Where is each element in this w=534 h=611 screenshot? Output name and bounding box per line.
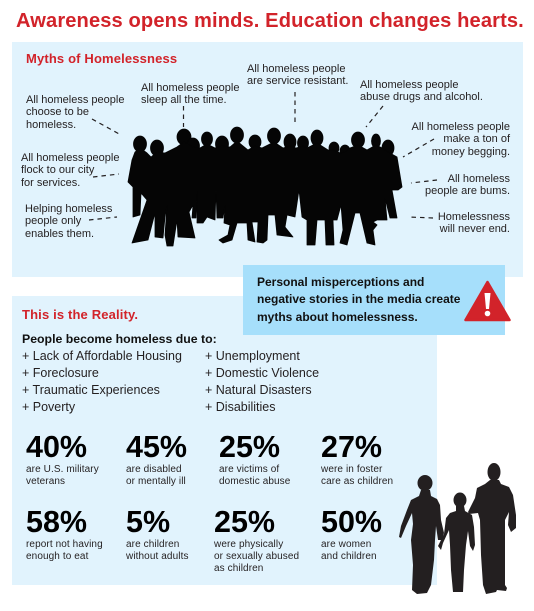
stat: 25% victims: are victims of bbox=[219, 464, 279, 474]
myth: enables: enables them. bbox=[25, 228, 94, 240]
myth: service resistant: are service resistant. bbox=[247, 75, 348, 87]
stat: 5%: without adults bbox=[126, 551, 189, 562]
stat: 45%: or mentally ill bbox=[126, 476, 186, 487]
stat: 45%: are disabled bbox=[126, 464, 182, 474]
stat: 40%: veterans bbox=[26, 476, 65, 487]
myth: never end: will never end. bbox=[440, 223, 510, 235]
myth: drugs: abuse drugs and alcohol. bbox=[360, 91, 483, 103]
causes list left bbox=[22, 349, 182, 414]
myth: flock bbox=[21, 152, 119, 189]
stat: 40% bbox=[26, 430, 99, 487]
causes list left: + Poverty bbox=[22, 400, 75, 414]
stat: 25% victims: 25% bbox=[219, 430, 280, 464]
myth: flock: flock to our city bbox=[21, 164, 94, 176]
myth: bums: people are bums. bbox=[425, 185, 510, 197]
stat: 27%: care as children bbox=[321, 476, 393, 487]
panel: reality bbox=[12, 296, 437, 585]
callout text: Personal misperceptions and bbox=[257, 274, 424, 288]
causes list right: + Disabilities bbox=[205, 400, 276, 414]
myth: begging: All homeless people bbox=[412, 121, 510, 133]
child bbox=[438, 492, 475, 592]
myth: never end: Homelessness bbox=[438, 211, 510, 223]
heading: reality: This is the Reality. bbox=[22, 307, 138, 322]
stat: 45%: 45% bbox=[126, 430, 187, 464]
stat: 5%: are children bbox=[126, 538, 179, 550]
causes list right bbox=[205, 349, 319, 414]
myth: choose: choose to be bbox=[26, 106, 89, 118]
stat: 27%: were in foster bbox=[321, 464, 382, 474]
myth: service resistant bbox=[247, 62, 348, 87]
stat: 50%: are women bbox=[321, 538, 371, 550]
man bbox=[468, 463, 516, 594]
stat: 25% abused bbox=[214, 505, 299, 574]
stat: 40%: 40% bbox=[26, 430, 87, 464]
title: Awareness opens minds. Education changes hearts. bbox=[16, 10, 524, 32]
myth: choose: homeless. bbox=[26, 119, 76, 131]
stat: 40%: are U.S. military bbox=[26, 464, 99, 474]
myth: begging bbox=[412, 121, 510, 158]
myth: begging: make a ton of bbox=[443, 133, 510, 145]
causes list left: + Traumatic Experiences bbox=[22, 383, 160, 397]
myth: bums bbox=[425, 172, 510, 197]
stat: 58%: enough to eat bbox=[26, 551, 88, 562]
stat: 50% bbox=[321, 505, 382, 562]
causes list right: + Unemployment bbox=[205, 349, 300, 363]
causes list right: + Domestic Violence bbox=[205, 366, 319, 380]
myth: sleep bbox=[141, 82, 239, 106]
panel: myths bbox=[12, 42, 523, 277]
myth: never end bbox=[438, 211, 510, 235]
stat: 50%: 50% bbox=[321, 505, 382, 539]
heading: myths: Myths of Homelessness bbox=[26, 51, 177, 66]
myth: flock: for services. bbox=[21, 177, 80, 189]
myth: drugs bbox=[360, 79, 483, 103]
callout text: myths about homelessness. bbox=[257, 310, 418, 324]
stat: 58% bbox=[26, 505, 103, 562]
bodies bbox=[128, 141, 402, 246]
heads bbox=[134, 127, 394, 157]
callout text: negative stories in the media create bbox=[257, 292, 460, 306]
stat: 58%: report not having bbox=[26, 538, 103, 550]
stat: 27% bbox=[321, 430, 393, 487]
causes list left: + Lack of Affordable Housing bbox=[22, 349, 182, 363]
myth: choose: All homeless people bbox=[26, 94, 124, 106]
myth: flock: All homeless people bbox=[21, 152, 119, 164]
stat: 27%: 27% bbox=[321, 430, 382, 464]
myth: enables bbox=[25, 203, 112, 240]
causes heading: People become homeless due to: bbox=[22, 332, 217, 346]
callout text bbox=[257, 274, 460, 324]
stat: 45% bbox=[126, 430, 187, 487]
stat: 25% victims: domestic abuse bbox=[219, 476, 290, 487]
stat: 50%: and children bbox=[321, 551, 377, 562]
stat: 5% bbox=[126, 505, 189, 562]
myth: service resistant: All homeless people bbox=[247, 62, 345, 74]
stat: 5%: 5% bbox=[126, 505, 170, 539]
myth: choose bbox=[26, 94, 124, 131]
stat: 25% abused: 25% bbox=[214, 505, 275, 539]
stat: 25% abused: as children bbox=[214, 563, 263, 574]
myth: bums: All homeless bbox=[448, 172, 510, 184]
woman bbox=[399, 475, 444, 594]
myth: begging: money begging. bbox=[432, 146, 510, 158]
causes list left: + Foreclosure bbox=[22, 366, 99, 380]
myth: sleep: All homeless people bbox=[141, 82, 239, 94]
myth: drugs: All homeless people bbox=[360, 79, 458, 91]
stat: 25% abused: were physically bbox=[214, 538, 283, 550]
myth: sleep: sleep all the time. bbox=[141, 94, 227, 106]
stat: 58%: 58% bbox=[26, 505, 87, 539]
stat: 25% abused: or sexually abused bbox=[214, 551, 299, 562]
callout bbox=[243, 265, 505, 335]
stat: 25% victims bbox=[219, 430, 290, 487]
myth: enables: people only bbox=[25, 215, 81, 227]
causes list right: + Natural Disasters bbox=[205, 383, 312, 397]
myth: enables: Helping homeless bbox=[25, 203, 112, 215]
